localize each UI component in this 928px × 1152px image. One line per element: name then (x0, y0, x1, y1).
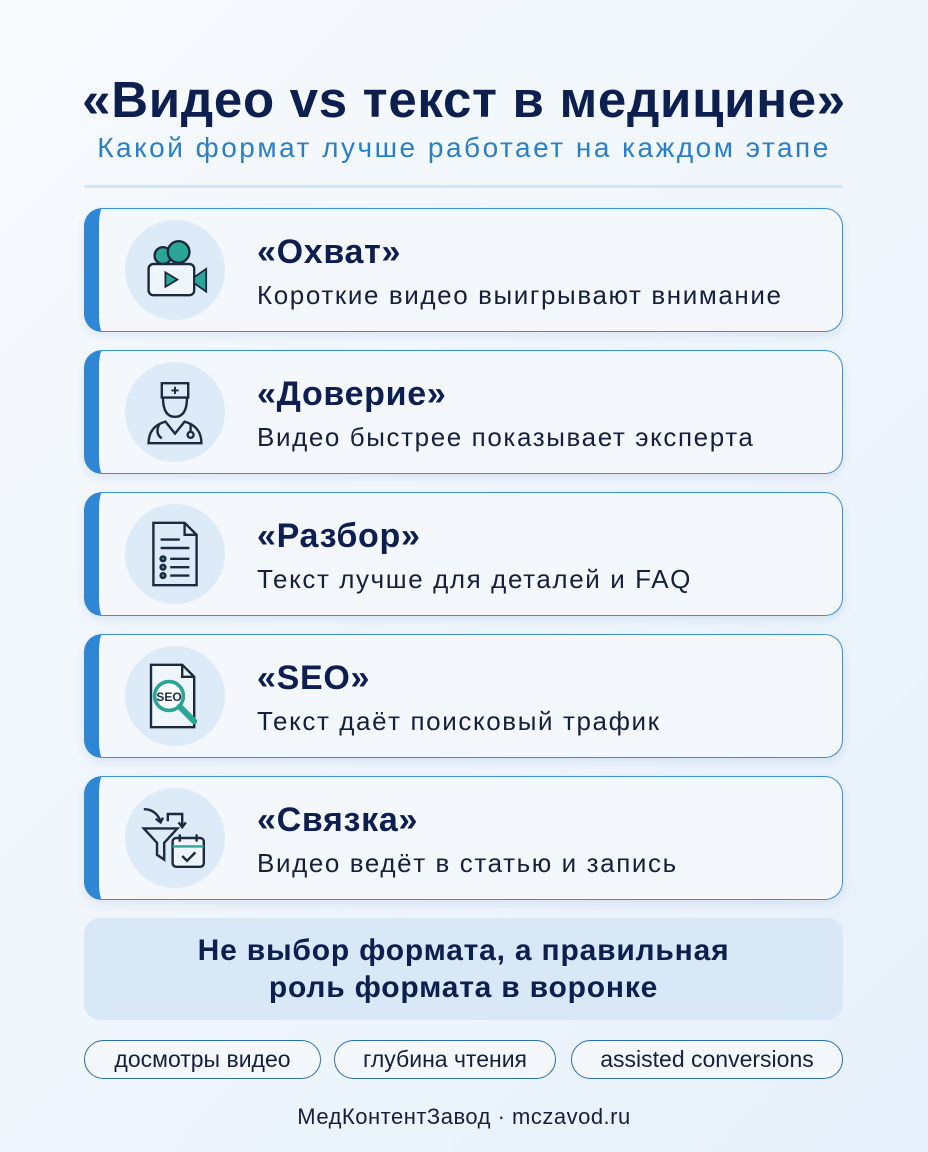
callout: conclusion: роль формата в воронке (269, 971, 658, 1004)
footer: МедКонтентЗавод · mczavod.ru (297, 1104, 631, 1129)
card: Связка: Видео ведёт в статью и запись (257, 848, 678, 878)
card: Доверие: «Доверие» (257, 375, 446, 413)
card: Доверие (84, 350, 843, 474)
pill: глубина чтения: глубина чтения (363, 1046, 527, 1072)
title: «Видео vs текст в медицине» (82, 71, 846, 128)
icon: doctor (125, 362, 225, 462)
callout: conclusion: Не выбор формата, а правильная (198, 934, 729, 967)
card: Связка (84, 776, 843, 900)
card: Доверие: Видео быстрее показывает эксперта (257, 422, 754, 452)
icon: video camera (125, 220, 225, 320)
card: SEO: «SEO» (257, 659, 370, 697)
card: SEO: Текст даёт поисковый трафик (257, 706, 661, 736)
pill: assisted conversions (571, 1040, 843, 1079)
pill: глубина чтения (334, 1040, 556, 1079)
card: Разбор (84, 492, 843, 616)
card: Разбор: «Разбор» (257, 517, 421, 555)
card: Охват (84, 208, 843, 332)
icon: SEO magnifier (125, 646, 225, 746)
card: SEO (84, 634, 843, 758)
pill: досмотры видео (84, 1040, 321, 1079)
icon: SEO magnifier: SEO (156, 690, 182, 704)
pill: assisted conversions: assisted conversions (600, 1046, 814, 1072)
card: Связка: «Связка» (257, 801, 418, 839)
card: Охват: Короткие видео выигрывают внимание (257, 280, 783, 310)
pill: досмотры видео: досмотры видео (114, 1046, 291, 1072)
icon: funnel to calendar (125, 788, 225, 888)
card: Разбор: Текст лучше для деталей и FAQ (257, 564, 692, 594)
callout: conclusion (84, 918, 843, 1020)
icon: document (125, 504, 225, 604)
subtitle: Какой формат лучше работает на каждом этапе (97, 132, 831, 163)
card: Охват: «Охват» (257, 233, 401, 271)
